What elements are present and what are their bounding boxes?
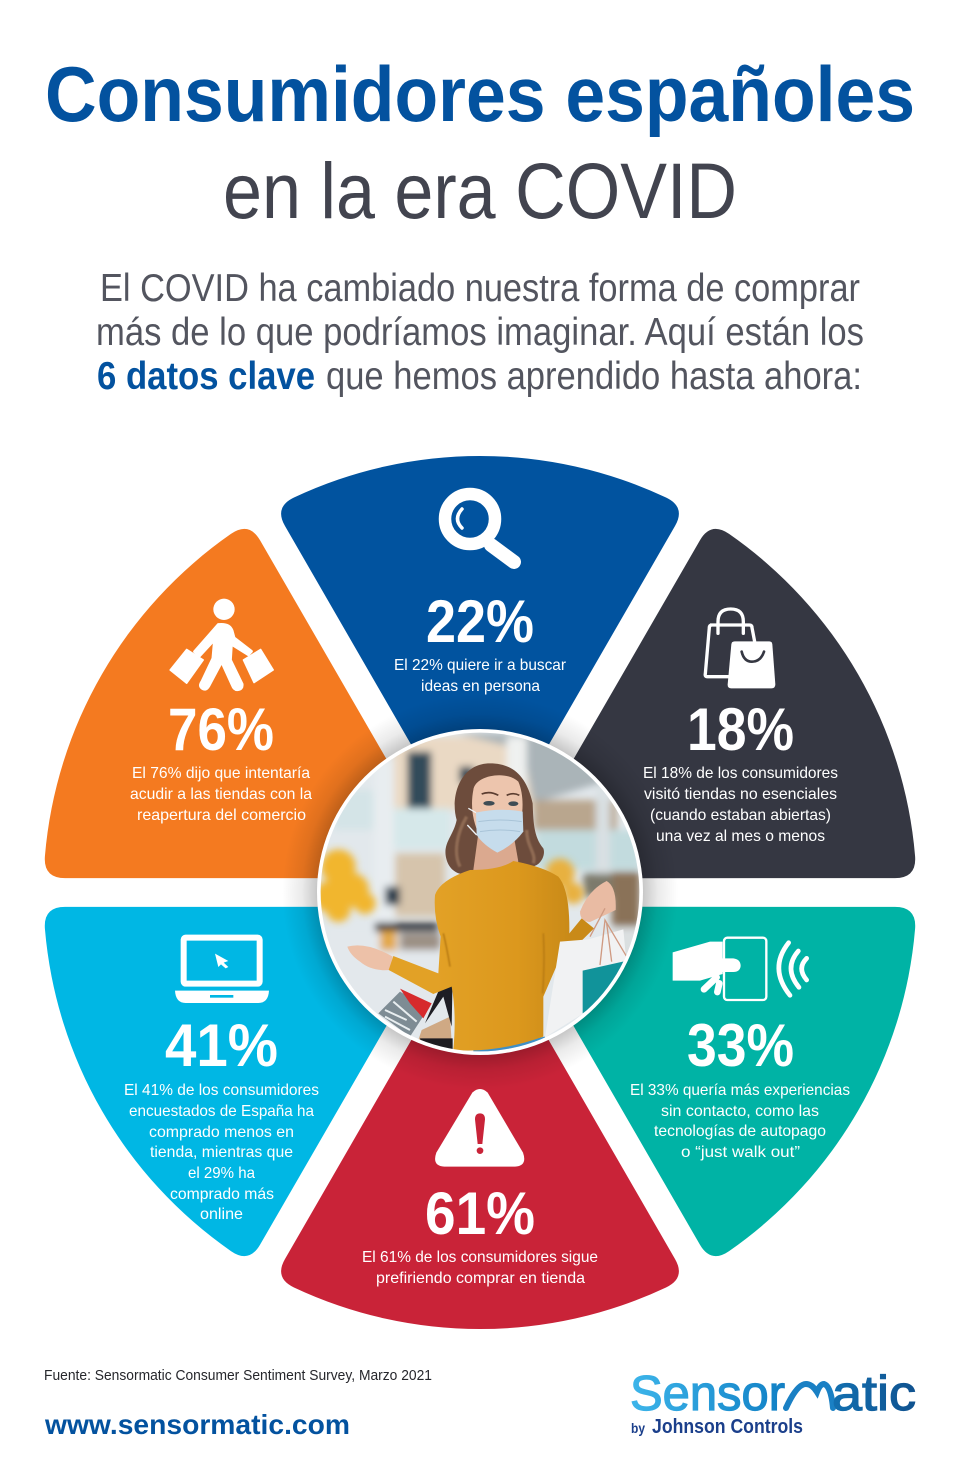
33% stat: tecnologías de autopago	[654, 1123, 826, 1140]
76% stat: El 76% dijo que intentaría	[132, 765, 310, 782]
18% stat: una vez al mes o menos	[656, 828, 825, 845]
intro text: El COVID ha cambiado nuestra forma de comprar	[100, 267, 860, 310]
source note: Fuente: Sensormatic Consumer Sentiment Survey, Marzo 2021	[44, 1368, 432, 1384]
18% stat: El 18% de los consumidores	[643, 765, 838, 782]
bags right	[545, 929, 627, 1037]
jeans	[473, 1036, 545, 1052]
18% stat	[643, 696, 838, 845]
icon: contactless payment	[673, 938, 807, 1000]
mask	[476, 810, 523, 853]
33% stat: o “just walk out”	[681, 1144, 800, 1161]
icon: shopping bags	[705, 609, 775, 688]
22% stat: ideas en persona	[421, 678, 540, 695]
intro text: 6 datos clave	[97, 355, 315, 398]
76% stat: 76%	[168, 696, 274, 763]
41% stat: online	[200, 1206, 243, 1223]
76% stat: acudir a las tiendas con la	[130, 786, 312, 803]
logo: Sensormatic by Johnson Controls: atic	[832, 1367, 916, 1421]
76% stat	[130, 696, 312, 824]
41% stat: encuestados de España ha	[129, 1103, 314, 1120]
panel: 61% in-store sector	[281, 921, 679, 1329]
logo: Sensormatic by Johnson Controls: by	[631, 1420, 645, 1436]
intro text: más de lo que podríamos imaginar. Aquí están los	[96, 311, 864, 354]
22% stat	[394, 588, 567, 695]
33% stat	[630, 1012, 850, 1161]
title	[45, 50, 915, 235]
hair	[445, 763, 544, 874]
33% stat: 33%	[687, 1012, 794, 1079]
41% stat: 41%	[165, 1012, 278, 1079]
41% stat: El 41% de los consumidores	[124, 1082, 319, 1099]
icon: laptop with cursor	[175, 938, 269, 1003]
logo: Sensormatic by Johnson Controls	[630, 1367, 916, 1438]
icon: warning triangle	[435, 1089, 524, 1167]
18% stat: (cuando estaban abiertas)	[650, 807, 831, 824]
logo: Sensormatic by Johnson Controls: Sensor	[630, 1367, 785, 1421]
hands	[347, 945, 393, 970]
33% stat: El 33% quería más experiencias	[630, 1082, 850, 1099]
bags left	[378, 992, 422, 1036]
icon: walking person with shopping bags	[170, 599, 273, 690]
logo: Sensormatic by Johnson Controls: Johnson Controls	[652, 1416, 803, 1438]
panel: 18% non-essential sector	[405, 502, 958, 1051]
sweater	[389, 861, 594, 1051]
panel: 33% contactless sector	[405, 734, 958, 1283]
41% stat	[124, 1012, 319, 1223]
panel: 76% reopening sector	[2, 502, 555, 1051]
intro text	[96, 267, 864, 398]
intro text: que hemos aprendido hasta ahora:	[326, 355, 862, 398]
18% stat: visitó tiendas no esenciales	[644, 786, 837, 803]
icon: magnifying glass	[445, 494, 514, 562]
title: en la era COVID	[223, 146, 737, 235]
33% stat: sin contacto, como las	[661, 1103, 819, 1120]
22% stat: 22%	[426, 588, 534, 655]
centre shadow	[282, 694, 678, 1090]
photo: woman with mask and shopping bags	[310, 720, 650, 1060]
41% stat: comprado menos en	[149, 1124, 294, 1141]
22% stat: El 22% quiere ir a buscar	[394, 657, 567, 674]
61% stat	[362, 1180, 598, 1287]
61% stat: 61%	[425, 1180, 535, 1247]
website url: www.sensormatic.com	[44, 1409, 350, 1440]
61% stat: prefiriendo comprar en tienda	[376, 1270, 585, 1287]
61% stat: El 61% de los consumidores sigue	[362, 1249, 598, 1266]
panel: 41% online sector	[2, 734, 555, 1283]
41% stat: comprado más	[170, 1186, 274, 1203]
41% stat: el 29% ha	[188, 1165, 255, 1182]
neck and face	[473, 836, 518, 870]
41% stat: tienda, mientras que	[150, 1144, 293, 1161]
panel: 22% search sector	[281, 456, 679, 864]
76% stat: reapertura del comercio	[137, 807, 306, 824]
18% stat: 18%	[687, 696, 794, 763]
